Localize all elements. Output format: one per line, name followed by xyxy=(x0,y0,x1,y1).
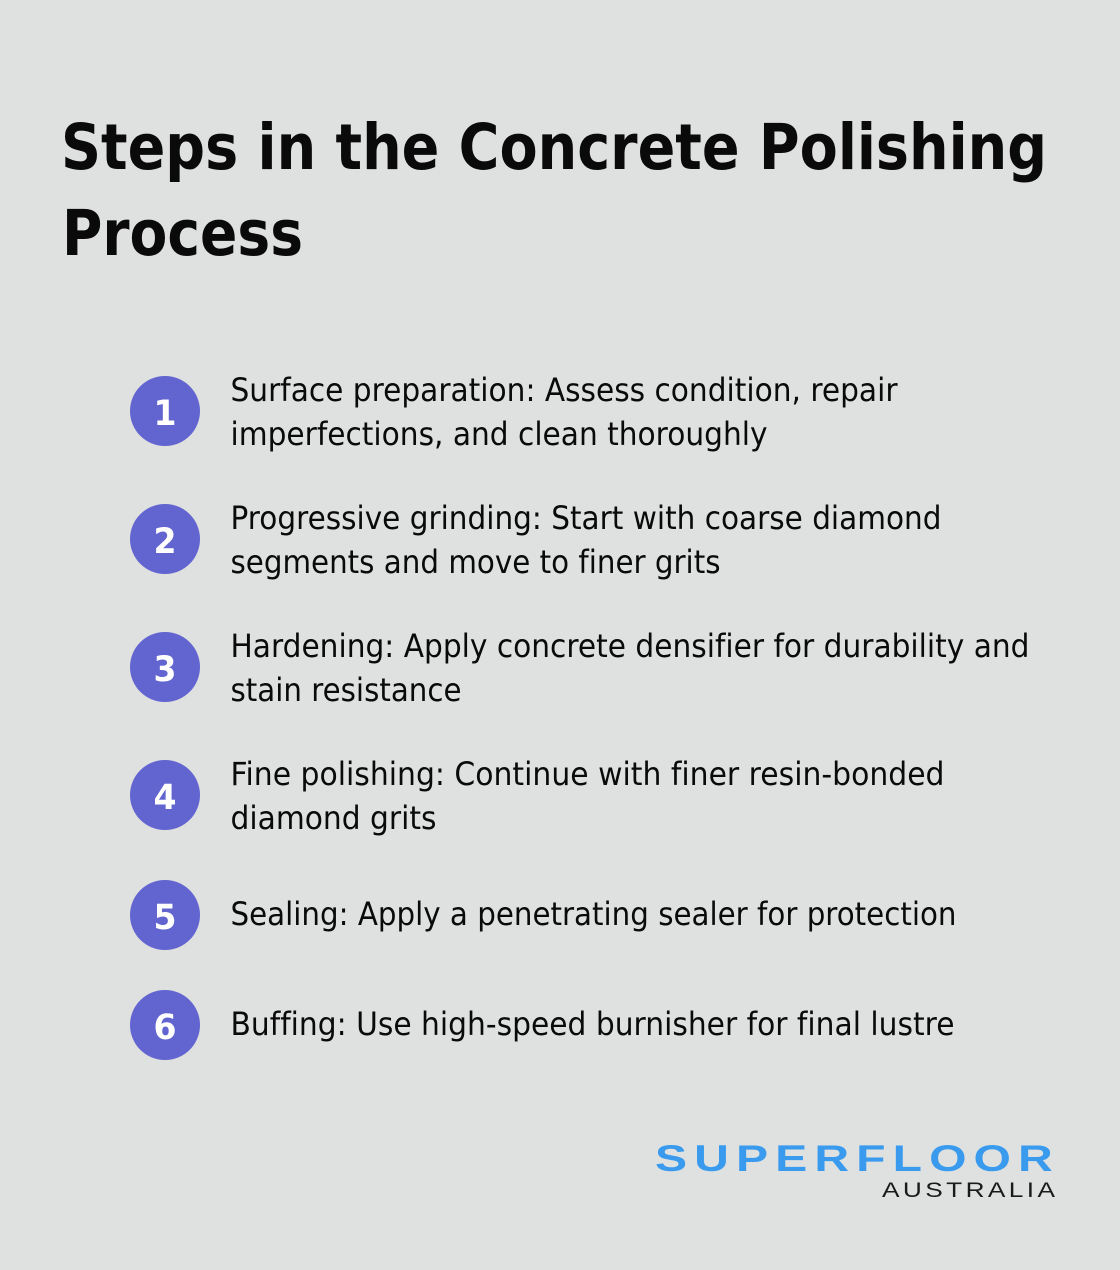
text: step 4 description: Fine polishing: Continue with finer resin-bonded xyxy=(230,755,944,793)
text: step 3 description xyxy=(230,627,1030,709)
logo: Superfloor Australia: SUPERFLOOR xyxy=(655,1138,1053,1180)
icon: number 3 badge: 3 xyxy=(154,650,176,690)
step 1 xyxy=(130,371,898,453)
icon: number 4 badge: 4 xyxy=(154,778,176,818)
icon: number 4 badge xyxy=(130,760,200,830)
title xyxy=(61,111,1047,270)
step 5 xyxy=(130,880,956,950)
logo: Superfloor Australia xyxy=(655,1138,1055,1202)
text: step 3 description: stain resistance xyxy=(230,671,462,709)
icon: number 5 badge: 5 xyxy=(154,898,176,938)
text: step 2 description: segments and move to finer grits xyxy=(230,543,720,581)
icon: number 1 badge: 1 xyxy=(154,394,176,434)
text: step 1 description xyxy=(230,371,898,453)
icon: number 2 badge xyxy=(130,504,200,574)
step 6 xyxy=(130,990,954,1060)
text: step 1 description: imperfections, and clean thoroughly xyxy=(230,415,768,453)
logo: Superfloor Australia: AUSTRALIA xyxy=(882,1178,1055,1202)
text: step 4 description xyxy=(230,755,944,837)
step 2 xyxy=(130,499,942,581)
text: step 2 description xyxy=(230,499,942,581)
text: step 2 description: Progressive grinding: Start with coarse diamond xyxy=(230,499,942,537)
icon: number 1 badge xyxy=(130,376,200,446)
title: Process xyxy=(62,197,303,270)
text: step 1 description: Surface preparation: Assess condition, repair xyxy=(230,371,898,409)
icon: number 2 badge: 2 xyxy=(154,522,176,562)
icon: number 3 badge xyxy=(130,632,200,702)
text: step 3 description: Hardening: Apply concrete densifier for durability and xyxy=(230,627,1030,665)
step 4 xyxy=(130,755,944,837)
text: step 4 description: diamond grits xyxy=(230,799,436,837)
icon: number 6 badge xyxy=(130,990,200,1060)
icon: number 5 badge xyxy=(130,880,200,950)
step 3 xyxy=(130,627,1030,709)
text: step 5 description: Sealing: Apply a penetrating sealer for protection xyxy=(230,895,956,933)
text: step 6 description: Buffing: Use high-speed burnisher for final lustre xyxy=(230,1005,954,1043)
icon: number 6 badge: 6 xyxy=(154,1008,176,1048)
